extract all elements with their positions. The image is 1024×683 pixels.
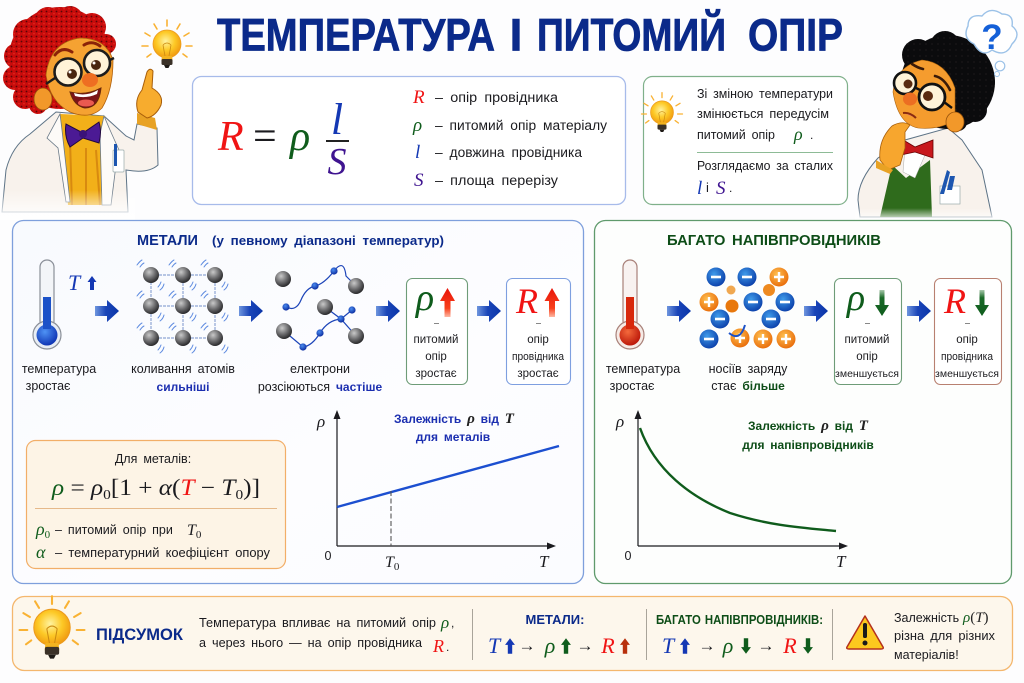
chart: rho of T for metals: T <box>385 554 394 571</box>
arrow <box>804 300 828 322</box>
icon: thought cloud with question mark: ? <box>981 18 1003 57</box>
title <box>217 10 843 60</box>
panel: main formula <box>192 76 626 204</box>
legend of symbols: S <box>414 170 424 191</box>
legend: alpha: – температурний коефіцієнт опору <box>55 546 271 560</box>
caption: temperature rises <box>606 362 680 393</box>
note text: . <box>729 181 732 195</box>
icon: thought cloud with question mark <box>966 10 1017 77</box>
icon: red thermometer <box>616 260 644 349</box>
box: resistance rises: R <box>515 281 538 321</box>
chart title: для напівпровідників <box>742 438 874 452</box>
panel: semiconductors <box>594 220 1012 584</box>
label: T rising <box>68 270 96 295</box>
arrow <box>376 300 400 322</box>
box: resistivity rises: питомий <box>414 334 458 346</box>
arrow <box>907 300 931 322</box>
box: resistance rises: зростає <box>517 368 559 380</box>
box: resistivity falls: зменшується <box>835 368 899 380</box>
legend: rho0: – питомий опір при <box>55 523 173 537</box>
formula: rho(T): )] <box>243 475 260 500</box>
caption: electrons scatter: електрони <box>290 362 350 376</box>
box: resistance falls: провідника <box>941 351 994 363</box>
arrow <box>239 300 263 322</box>
box: resistance falls: опір <box>956 334 978 346</box>
summary: semiconductors chain: ρ <box>722 633 733 658</box>
character: thinking scientist with dark hair <box>855 31 1000 222</box>
summary text: . <box>446 640 449 654</box>
legend of symbols: R <box>412 87 425 108</box>
formula R = rho l / S: = <box>253 114 277 160</box>
heading: summary: ПІДСУМОК <box>96 625 184 644</box>
note text: Розглядаємо за сталих <box>697 158 833 173</box>
box: resistance rises <box>506 278 570 384</box>
legend: rho0: 0 <box>196 529 202 541</box>
formula: rho(T): 0 <box>235 488 243 503</box>
note text: змінюється передусім <box>697 106 829 121</box>
box: resistivity rises: зростає <box>415 368 457 380</box>
legend: alpha <box>36 542 271 562</box>
summary: semiconductors chain: T <box>662 633 676 658</box>
summary: semiconductors chain: → <box>698 636 716 655</box>
chart: rho of T for semiconductors: 0 <box>625 549 632 563</box>
chart: rho of T for metals: ρ <box>316 412 325 431</box>
chart title: Залежність ρ від T <box>748 418 869 434</box>
legend: rho0: T <box>187 522 196 539</box>
chart title <box>394 411 515 444</box>
chart: rho of T for semiconductors: T <box>836 552 847 571</box>
summary text: Температура впливає на питомий опір <box>199 615 436 630</box>
heading: metals: (у певному діапазоні температур) <box>212 233 444 248</box>
caption: temperature rises: зростає <box>610 379 655 393</box>
box: resistivity falls <box>834 277 902 384</box>
note text: питомий опір <box>697 127 775 142</box>
summary: metals chain: R <box>600 633 615 658</box>
summary: metals chain <box>488 612 630 658</box>
note text: S <box>716 178 726 199</box>
formula: rho(T): ρ = ρ <box>52 475 102 500</box>
icon: blue thermometer <box>33 260 61 349</box>
warning text: ρ(T) <box>962 610 989 626</box>
icon: warning triangle <box>847 616 883 649</box>
icon: note bulb <box>642 93 682 132</box>
summary text: ρ <box>440 613 449 632</box>
summary: metals chain: T <box>488 633 502 658</box>
note text: і <box>706 180 709 195</box>
note text: Зі зміною температури <box>697 86 833 101</box>
box: resistivity falls: ρ <box>846 277 865 319</box>
legend of symbols: – довжина провідника <box>435 145 582 160</box>
note text: . <box>810 128 813 142</box>
chart: rho of T for metals: 0 <box>325 549 332 563</box>
summary: semiconductors chain: → <box>758 636 774 655</box>
warning text <box>894 610 995 662</box>
summary text <box>199 613 454 656</box>
formula: rho(T): 0 <box>103 488 111 503</box>
heading: semiconductors: БАГАТО НАПІВПРОВІДНИКІВ <box>667 233 881 249</box>
legend: rho0: ρ <box>36 519 45 539</box>
summary: metals chain: → <box>576 636 594 655</box>
label: T rising: T <box>68 270 82 295</box>
summary: semiconductors chain <box>656 613 823 658</box>
formula R = rho l / S: S <box>328 141 346 183</box>
legend: rho0: 0 <box>45 529 51 541</box>
legend of symbols: ρ <box>412 115 422 136</box>
box: resistance falls <box>934 278 1002 384</box>
icon: summary bulb <box>20 596 85 659</box>
caption: temperature rises: зростає <box>26 379 71 393</box>
box: metals formula: Для металів: <box>115 452 191 466</box>
chart: rho of T for metals <box>316 410 559 573</box>
note text: ρ <box>793 124 803 144</box>
box: resistivity falls: питомий <box>845 334 889 346</box>
title: ОПІР <box>748 10 843 60</box>
box: resistivity rises: ρ <box>415 277 434 319</box>
legend: alpha: α <box>36 542 46 562</box>
box: metals formula <box>26 440 286 568</box>
panel: summary <box>12 596 1012 670</box>
legend of symbols <box>412 87 607 191</box>
illustration: electrons scattering <box>275 266 364 351</box>
chart: rho of T for metals: T <box>539 552 550 571</box>
caption: more carriers: стає більше <box>711 379 785 393</box>
illustration: vibrating atom lattice <box>137 260 228 353</box>
character: scientist with red hair pointing up <box>0 6 162 220</box>
chart: rho of T for metals: 0 <box>394 561 400 573</box>
caption: more carriers: носіїв заряду <box>709 362 788 376</box>
caption: more carriers <box>709 362 788 393</box>
box: resistance rises: провідника <box>512 351 565 363</box>
box: resistivity rises: опір <box>425 351 447 363</box>
summary: metals chain: ρ <box>544 633 555 658</box>
formula R = rho l / S: l <box>331 95 343 144</box>
box: resistance rises: опір <box>527 334 549 346</box>
summary: semiconductors chain: R <box>782 633 797 658</box>
summary text: , <box>451 616 454 630</box>
legend of symbols: – площа перерізу <box>435 173 558 188</box>
arrow <box>667 300 691 322</box>
title: І <box>510 10 522 60</box>
heading: metals <box>137 233 444 249</box>
chart title: для металів <box>416 430 490 444</box>
legend of symbols: – опір провідника <box>435 90 559 105</box>
heading: metals: МЕТАЛИ <box>137 233 198 249</box>
caption: atom vibrations: сильніші <box>157 380 209 394</box>
box: resistance falls: R <box>943 281 966 321</box>
formula R = rho l / S: ρ <box>288 114 310 160</box>
summary: metals chain: МЕТАЛИ: <box>526 612 584 627</box>
caption: atom vibrations: коливання атомів <box>131 362 235 376</box>
caption: temperature rises: температура <box>22 362 96 376</box>
box: resistance falls: зменшується <box>935 368 999 380</box>
legend of symbols: – питомий опір матеріалу <box>435 118 607 133</box>
caption: temperature rises: температура <box>606 362 680 376</box>
note text: l <box>697 178 702 199</box>
caption: electrons scatter: розсіюються частіше <box>258 380 382 394</box>
formula: rho(T): α(T − T <box>159 475 234 500</box>
caption: temperature rises <box>22 362 96 393</box>
note text <box>697 86 833 199</box>
caption: atom vibrations <box>131 362 235 394</box>
arrow <box>477 300 501 322</box>
summary text: а через нього — на опір провідника <box>199 635 423 650</box>
chart: rho of T for semiconductors <box>615 410 874 571</box>
warning text: різна для різних <box>894 628 995 643</box>
warning text: Залежність <box>894 611 959 625</box>
summary: semiconductors chain: БАГАТО НАПІВПРОВІДНИКІВ: <box>656 613 823 627</box>
summary: metals chain: → <box>518 636 536 655</box>
panel: metals <box>12 220 584 584</box>
legend: rho0 <box>35 519 202 541</box>
summary text: R <box>432 636 444 656</box>
chart title <box>742 418 874 452</box>
box: resistivity falls: опір <box>856 351 878 363</box>
title: ТЕМПЕРАТУРА <box>217 10 495 60</box>
caption: electrons scatter <box>258 362 382 394</box>
warning text: матеріалів! <box>894 648 959 662</box>
chart title: Залежність ρ від T <box>394 411 515 427</box>
illustration: charge carriers <box>700 268 796 348</box>
panel: note about temperature <box>642 76 848 204</box>
chart: rho of T for semiconductors: ρ <box>615 412 624 431</box>
formula R = rho l / S: R <box>217 114 244 160</box>
formula: rho(T): [1 + <box>111 475 159 500</box>
arrow <box>95 300 119 322</box>
legend of symbols: l <box>415 142 420 163</box>
title: ПИТОМИЙ <box>537 10 726 60</box>
formula R = rho l / S <box>217 95 349 183</box>
box: resistivity rises <box>406 277 468 384</box>
icon: light bulb near left character <box>142 20 192 68</box>
